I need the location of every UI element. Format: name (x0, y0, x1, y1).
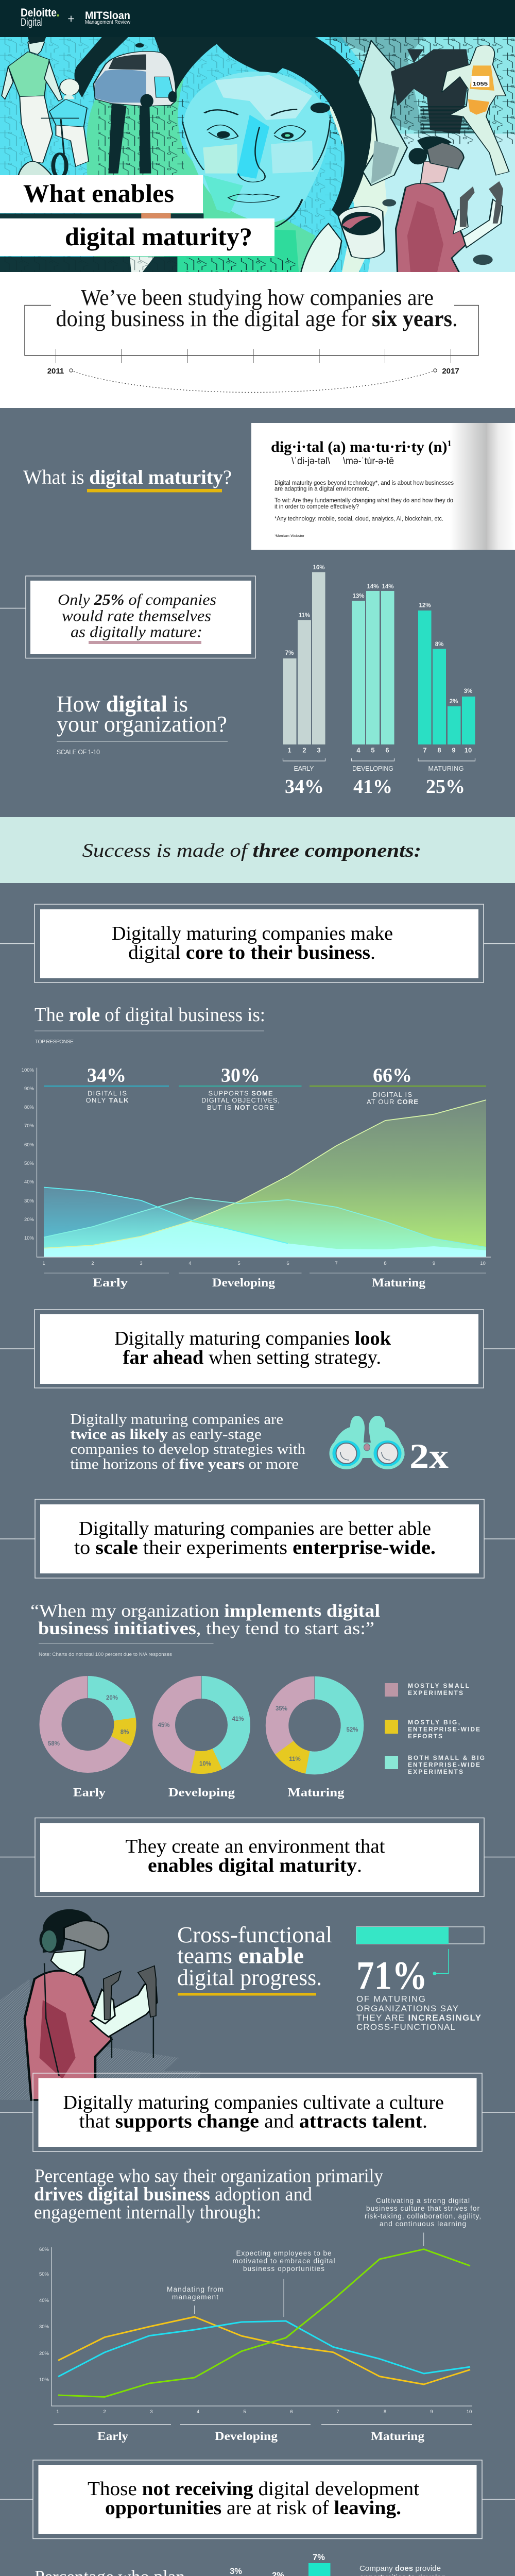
bar value labels: 11% (299, 613, 310, 619)
y axis labels (39, 2247, 49, 2383)
top value labels: 7% (313, 2553, 325, 2562)
donut chart: developing: 45% (158, 1722, 170, 1728)
donut legend: MOSTLY BIG, (408, 1719, 460, 1726)
callout: only 25%: Only 25% of companies (58, 590, 216, 608)
donut legend: MOSTLY SMALL (408, 1682, 469, 1689)
y axis labels: 50% (24, 1161, 35, 1166)
dictionary definition card (251, 423, 515, 550)
stage names: DEVELOPING (352, 765, 393, 772)
bar value labels: 7% (285, 650, 294, 656)
heading: drives digital business: engagement internally through: (34, 2202, 261, 2223)
callout: enables digital maturity (0, 1818, 515, 1896)
definition text: it in order to compete effectively? (274, 504, 359, 510)
callout: look far ahead: Digitally maturing companies look (114, 1328, 391, 1349)
callout: at risk of leaving: opportunities are at risk of leaving. (105, 2497, 401, 2519)
heading: cross-functional teams: teams enable (177, 1943, 304, 1968)
x axis labels: 8 (384, 2409, 386, 2415)
heading: how digital is your organization: SCALE OF 1-10 (57, 749, 100, 756)
pronunciation: \ˈdi-jə-təl\ (291, 456, 331, 467)
twice as likely text: twice as likely as early-stage (70, 1426, 262, 1443)
callout: scale enterprise-wide: to scale their experiments enterprise-wide. (74, 1537, 436, 1558)
annotation: mandating: management (172, 2293, 218, 2301)
plus sign: + (67, 12, 75, 25)
title line 2: digital maturity? (65, 222, 252, 251)
heading: drives digital business: drives digital business adoption and (34, 2184, 312, 2205)
donut chart: early (48, 1676, 129, 1762)
timeline 2011 to 2017: 2011 (47, 367, 64, 376)
heading: drives digital business (34, 2166, 383, 2223)
donut chart: developing: 41% (232, 1716, 244, 1722)
scale numbers: 6 (385, 746, 389, 754)
stage labels: Developing (212, 1276, 276, 1289)
hero header bar with logos (0, 0, 515, 37)
intro heading: doing business in the digital age for six years. (56, 306, 458, 331)
scale numbers: 3 (317, 746, 321, 754)
x axis labels: 4 (197, 2409, 199, 2415)
key: does provide (359, 2565, 446, 2576)
stage names: MATURING (428, 765, 464, 772)
y axis labels: 60% (24, 1142, 35, 1148)
x axis labels: 5 (243, 2409, 246, 2415)
talk area (44, 1187, 486, 1257)
donut chart: early: 8% (121, 1729, 129, 1735)
donut legend: EFFORTS (408, 1733, 442, 1740)
logo: MIT Sloan Management Review: MITSloan (85, 10, 130, 22)
annotation: at our core (310, 1064, 486, 1106)
donut chart: early: 20% (106, 1695, 118, 1701)
callout: only 25%: would rate themselves (62, 607, 211, 624)
heading: how digital is your organization: How digital is (57, 691, 188, 717)
heading: drives digital business: Percentage who say their organization primarily (35, 2166, 383, 2187)
stage percentages: 34% (285, 776, 324, 798)
stage labels: Maturing (372, 1276, 426, 1289)
annotation: supports some: SUPPORTS SOME (208, 1089, 273, 1097)
small runner (442, 45, 509, 175)
callout: look far ahead: far ahead when setting strategy. (123, 1347, 381, 1368)
callout: core to their business: digital core to their business . (128, 942, 375, 963)
annotation: supports some: 30% (221, 1064, 260, 1086)
VR man (396, 183, 467, 274)
donut chart: developing (158, 1676, 244, 1767)
intro white panel (0, 272, 515, 408)
quote heading: implementing initiatives: business initiatives , they tend to start as:” (38, 1618, 374, 1638)
scale numbers: 2 (302, 746, 306, 754)
left man (28, 39, 44, 55)
quote heading: implementing initiatives (30, 1601, 380, 1657)
callout: supports change and attracts talent: that supports change and attracts talent . (79, 2110, 427, 2132)
x axis labels: 1 (56, 2409, 59, 2415)
bar value labels (285, 565, 472, 705)
timeline 2011 to 2017 (25, 305, 478, 393)
heading: the role of digital business (35, 1004, 265, 1045)
annotation: mandating (167, 2285, 224, 2314)
definition text (274, 480, 454, 538)
title (0, 175, 274, 256)
twice as likely text: companies to develop strategies with (70, 1441, 306, 1458)
supports some area (44, 1198, 486, 1257)
scale numbers: 5 (371, 746, 375, 754)
y axis labels: 100% (22, 1067, 35, 1073)
callout: supports change and attracts talent: Digitally maturing companies cultivate a culture (63, 2092, 444, 2113)
x axis labels: 2 (91, 1261, 94, 1266)
callout: core to their business (0, 904, 515, 982)
bar value labels: 14% (367, 584, 379, 590)
x axis labels: 6 (286, 1261, 289, 1266)
y axis labels: 30% (24, 1198, 35, 1204)
logo: Deloitte Digital: Digital (21, 16, 43, 28)
title line 1 box (0, 175, 203, 213)
scale numbers: 7 (423, 746, 427, 754)
x axis labels: 10 (467, 2409, 472, 2415)
stage labels: Maturing (371, 2430, 425, 2443)
callout: enables digital maturity: enables digital maturity . (148, 1855, 362, 1876)
x axis labels: 4 (188, 1261, 192, 1266)
x axis labels: 3 (140, 1261, 143, 1266)
bars: company does provide (226, 2563, 331, 2576)
donut legend: BOTH SMALL & BIG (408, 1754, 485, 1761)
y axis labels: 20% (39, 2351, 49, 2357)
logo: Deloitte Digital (21, 6, 59, 28)
dark vertical stripes (108, 103, 127, 174)
hair arch (75, 37, 372, 220)
x axis labels: 8 (384, 1261, 387, 1266)
area chart: role of digital business (22, 1064, 491, 1289)
stage percentages: 41% (353, 776, 392, 798)
stage labels (93, 1276, 426, 1289)
intro heading (56, 285, 458, 331)
stage labels: Developing (215, 2430, 278, 2443)
stat: 71% cross-functional (356, 1927, 484, 2032)
annotation: at our core: AT OUR CORE (367, 1098, 418, 1106)
top value labels: 3% (230, 2567, 242, 2576)
definition text: To wit: Are they fundamentally changing what they do and how they do (274, 498, 453, 504)
stage percentages: 25% (426, 776, 465, 798)
heading: the role of digital business: The role of digital business is: (35, 1004, 265, 1026)
heading: cross-functional teams: Cross-functional (177, 1922, 332, 1947)
callout: scale enterprise-wide: Digitally maturing companies are better able (79, 1518, 431, 1539)
logo: MIT Sloan Management Review: Management Review (85, 19, 130, 25)
face ink lines (182, 109, 330, 227)
callout: look far ahead (0, 1310, 515, 1388)
donut chart: early: 58% (48, 1741, 60, 1747)
scale numbers: 9 (452, 746, 456, 754)
diverging bar chart: plan to leave by role (213, 2553, 455, 2576)
x axis labels: 7 (336, 2409, 339, 2415)
top value labels (228, 2553, 328, 2576)
stat: 71% cross-functional: THEY ARE INCREASINGLY (356, 2013, 482, 2023)
donut chart: maturing: 11% (289, 1756, 301, 1762)
hanging figure (358, 41, 407, 185)
right background area (368, 37, 515, 274)
heading: cross-functional teams (177, 1922, 332, 1996)
callout: core to their business: Digitally maturing companies make (112, 923, 393, 944)
annotation: cultivating culture: and continuous learning (380, 2220, 466, 2228)
woman's face (184, 72, 330, 223)
bar value labels: 12% (419, 603, 431, 609)
callout: at risk of leaving (0, 2460, 515, 2539)
stage labels (97, 2430, 425, 2443)
pronunciation: \mə-ˈtu̇r-ə-tē (343, 456, 394, 467)
x axis labels: 2 (103, 2409, 106, 2415)
quote heading: implementing initiatives: Note: Charts do not total 100 percent due to N/A responses (39, 1652, 172, 1657)
donut chart: maturing: 52% (346, 1727, 358, 1733)
overlap area below all lines (44, 1222, 486, 1257)
x axis labels: 1 (42, 1261, 45, 1266)
definition headword: 1 (447, 438, 452, 448)
stage labels: Early (97, 2430, 129, 2443)
line: expecting employees to be motivated (58, 2321, 470, 2377)
progress bar (356, 1927, 484, 1944)
y axis labels: 30% (39, 2324, 49, 2330)
dark foreground strip behind title (0, 213, 203, 274)
annotation: supports some (179, 1064, 302, 1111)
stat: 71% cross-functional: CROSS-FUNCTIONAL (356, 2022, 455, 2032)
heading: how digital is your organization: your organization? (57, 711, 227, 737)
definition text: are adapting in a digital environment. (274, 486, 369, 493)
developing bars (352, 591, 394, 744)
callout: only 25%: as digitally mature: (71, 622, 202, 641)
callout: enables digital maturity: They create an environment that (126, 1836, 385, 1857)
bar chart: maturity scale (283, 565, 475, 798)
scale numbers: 4 (356, 746, 360, 754)
donut stage labels (73, 1786, 345, 1799)
y axis labels: 10% (39, 2377, 49, 2383)
hero illustration: 1055 (473, 81, 488, 87)
hero illustration (0, 37, 515, 274)
annotation: cultivating culture: business culture that strives for (366, 2205, 480, 2212)
stage labels: Early (93, 1276, 128, 1289)
annotation: only talk (44, 1064, 169, 1104)
line chart: how digital adoption is driven (39, 2197, 481, 2443)
line: mandating from management (58, 2317, 470, 2384)
bar value labels: 8% (435, 641, 443, 648)
x axis labels: 6 (290, 2409, 293, 2415)
timeline 2011 to 2017: 2017 (442, 367, 459, 376)
stage names: EARLY (294, 765, 314, 772)
title line 2 box (0, 218, 274, 256)
stage percentages (285, 776, 465, 798)
stat: 2x: 2x (409, 1436, 449, 1476)
x axis labels (42, 1261, 486, 1266)
line: cultivating digital culture (58, 2249, 470, 2397)
donut legend: ENTERPRISE-WIDE (408, 1726, 480, 1733)
donut chart: developing: 10% (199, 1761, 211, 1767)
x axis labels: 5 (237, 1261, 241, 1266)
x axis labels: 3 (150, 2409, 153, 2415)
stage names (294, 765, 464, 772)
annotation: cultivating culture: Cultivating a strong digital (376, 2197, 470, 2205)
banner: success is made of three components (0, 817, 515, 883)
annotation: expecting employees: business opportunities (243, 2265, 324, 2273)
y axis labels: 80% (24, 1105, 35, 1110)
definition text: ¹Merriam-Webster (274, 534, 305, 538)
stat: 71% cross-functional: ORGANIZATIONS SAY (356, 2004, 458, 2013)
logo: Deloitte Digital: Deloitte (21, 6, 57, 19)
x axis labels: 7 (335, 1261, 338, 1266)
heading: what is digital maturity: What is digital maturity? (23, 466, 232, 488)
y axis labels: 70% (24, 1123, 35, 1129)
silhouettes (391, 49, 470, 134)
coffee cup and hand (301, 224, 341, 274)
early bars (283, 572, 325, 744)
illustration: VR headset person (0, 1909, 200, 2100)
annotation: only talk: ONLY TALK (85, 1096, 129, 1104)
annotation: cultivating culture (365, 2197, 481, 2246)
bar value labels: 3% (464, 688, 472, 694)
y axis labels: 20% (24, 1217, 35, 1223)
callout: scale enterprise-wide (0, 1499, 515, 1578)
bar value labels: 16% (313, 565, 325, 571)
twice as likely text (70, 1411, 306, 1472)
intro heading: We’ve been studying how companies are (81, 285, 434, 310)
annotation: supports some: BUT IS NOT CORE (207, 1104, 274, 1111)
core area (44, 1100, 486, 1257)
x axis labels: 10 (480, 1261, 486, 1266)
y axis labels: 40% (39, 2298, 49, 2303)
key: does provide: Company does provide (359, 2565, 441, 2573)
annotation: at our core: 66% (373, 1064, 412, 1086)
twice as likely text: time horizons of five years or more (70, 1456, 299, 1472)
y axis labels: 90% (24, 1086, 35, 1092)
annotation: only talk: DIGITAL IS (88, 1089, 127, 1097)
pronunciation (291, 456, 394, 467)
green swirl (87, 78, 315, 274)
donut legend: EXPERIMENTS (408, 1689, 463, 1697)
stat: 71% cross-functional: OF MATURING (356, 1994, 425, 2004)
callout: at risk of leaving: Those not receiving digital development (88, 2478, 419, 2500)
quote heading: implementing initiatives: “When my organization implements digital (30, 1601, 380, 1621)
donut stage labels: Early (73, 1786, 106, 1799)
donut chart: maturing (276, 1676, 358, 1763)
annotation: at our core: DIGITAL IS (373, 1091, 412, 1098)
annotation: expecting employees: Expecting employees to be (236, 2249, 332, 2257)
donut legend (385, 1682, 485, 1775)
self-driving car (94, 52, 176, 106)
stat: 71% cross-functional: 71% (356, 1953, 427, 1998)
x axis labels: 9 (433, 1261, 435, 1266)
annotation: expecting employees: motivated to embrace digital (233, 2257, 335, 2265)
definition headword: dig·i·tal (a) ma·tu·ri·ty (n) (271, 438, 445, 455)
maturing bars (418, 611, 475, 744)
callout: only 25% (0, 576, 255, 658)
annotation: mandating: Mandating from (167, 2285, 224, 2293)
scale numbers: 1 (287, 746, 291, 754)
scale numbers (287, 746, 472, 754)
donut stage labels: Developing (168, 1786, 235, 1799)
definition text: Digital maturity goes beyond technology*, and is about how businesses (274, 480, 454, 486)
annotation: only talk: 34% (87, 1064, 126, 1086)
donut stage labels: Maturing (287, 1786, 345, 1799)
donut chart: maturing: 35% (276, 1706, 287, 1712)
bar value labels: 13% (352, 594, 365, 600)
annotation: cultivating culture: risk-taking, collaboration, agility, (365, 2212, 481, 2220)
heading: the role of digital business: TOP RESPONSE (35, 1039, 74, 1045)
bar value labels: 14% (382, 584, 394, 590)
x axis labels (56, 2409, 472, 2415)
title line 1: What enables (23, 179, 174, 208)
kid on bike (49, 99, 87, 127)
annotation: expecting employees (233, 2249, 335, 2317)
banner: success is made of three components: Success is made of three components: (82, 840, 421, 861)
y axis labels (22, 1067, 35, 1241)
donut legend: EXPERIMENTS (408, 1768, 463, 1775)
x axis labels: 9 (430, 2409, 433, 2415)
twice as likely text: Digitally maturing companies are (70, 1411, 283, 1428)
scale numbers: 10 (465, 746, 472, 754)
y axis labels: 50% (39, 2272, 49, 2277)
donut legend: ENTERPRISE-WIDE (408, 1761, 480, 1768)
y axis labels: 40% (24, 1179, 35, 1185)
y axis labels: 60% (39, 2247, 49, 2252)
y axis labels: 10% (24, 1235, 35, 1241)
bar value labels: 2% (450, 699, 458, 705)
annotation: supports some: DIGITAL OBJECTIVES, (201, 1096, 280, 1104)
heading: cross-functional teams: digital progress. (177, 1965, 322, 1990)
heading: how digital is your organization (57, 691, 228, 756)
icon: binoculars (330, 1416, 405, 1469)
callout: supports change and attracts talent (0, 2073, 515, 2151)
definition text: *Any technology: mobile, social, cloud, analytics, AI, blockchain, etc. (274, 516, 443, 522)
scale numbers: 8 (437, 746, 441, 754)
